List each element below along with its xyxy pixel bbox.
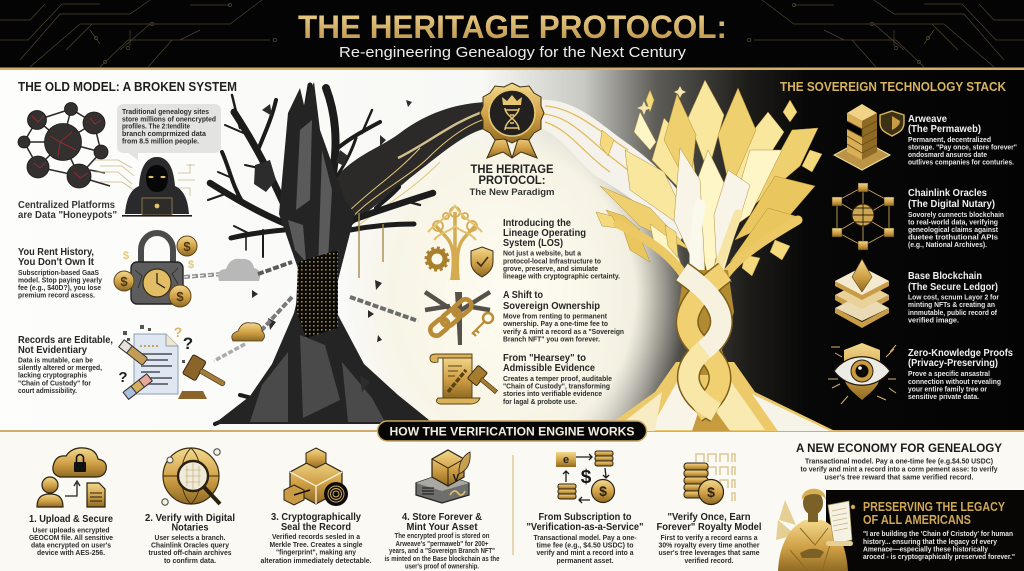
callout: traditional sites [117, 104, 221, 160]
panel: new economy: to verify and mint a record into a corm pement asse: to verify [800, 466, 998, 474]
step 4: store forever and mint: Mint Your Asset [406, 522, 478, 533]
icon: figure holding scroll [776, 489, 855, 571]
text: lineage operating system: Not just a website, but a [503, 250, 581, 258]
text: rent history: Subscription-based GaaS [18, 270, 99, 277]
text: editable records [18, 335, 113, 395]
illustration: crystal gold tree [540, 80, 835, 431]
divider [512, 455, 514, 555]
column: from subscription: verify and mint a record into a [536, 550, 634, 557]
column: from subscription: permanent asset. [556, 558, 614, 565]
text: admissible evidence [503, 353, 612, 406]
banner: how the verification engine works [378, 421, 646, 441]
heading: preserving the legacy: OF ALL AMERICANS [863, 513, 971, 527]
step 1: upload and secure [29, 448, 113, 557]
text: zero knowledge: connection without revealing [908, 379, 1001, 386]
text: lineage operating system: Introducing the [503, 218, 571, 229]
icon: padlock with clock and coins: $ [183, 239, 191, 254]
text: lineage operating system: lineage with cryptographic certainty. [503, 274, 620, 280]
text: sovereign ownership: verify & mint a record as a "Sovereign [503, 329, 624, 336]
step 1: upload and secure: 1. Upload & Secure [29, 514, 113, 525]
icon: payment flow with coins: e [563, 454, 569, 466]
icon: broken network of nodes [18, 102, 110, 188]
panel: old model [18, 80, 292, 399]
text: editable records: silently altered or merged, [18, 365, 102, 372]
crown crystals [596, 80, 822, 290]
step 3: cryptographically seal the record [260, 448, 372, 565]
icon: padlock with clock and coins: $ [120, 274, 128, 289]
step 4: store forever and mint: is minted on the Base blockchain as the [384, 556, 500, 563]
text: arweave: Arweave [908, 114, 947, 125]
text: admissible evidence: for lagal & probote use. [503, 399, 577, 406]
column: verify once: First to verify a record earns a [660, 535, 758, 542]
heading: new paradigm: PROTOCOL: [478, 175, 546, 187]
step 4: store forever and mint: 4. Store Forever & [402, 512, 482, 523]
text: rent history [18, 247, 102, 300]
title [298, 9, 727, 61]
panel: new economy: A NEW ECONOMY FOR GENEALOGY [796, 441, 1002, 455]
text: arweave: storage. "Pay once, store forever" [908, 144, 1017, 152]
text: arweave [908, 114, 1017, 166]
text: rent history: fee (e.g., $40D?), you lose [18, 285, 101, 292]
text: chainlink: Chainlink Oracles [908, 188, 987, 199]
heading: old model: THE OLD MODEL: A BROKEN SYSTEM [18, 80, 237, 94]
text: base blockchain: Base Blockchain [908, 271, 982, 282]
step 2: verify with digital notaries: 2. Verify with Digital [145, 513, 235, 524]
icon: hooded hacker with laptop [95, 157, 195, 217]
icon: padlock with clock and coins: $ [188, 259, 194, 271]
text: honeypots: Centralized Platforms [18, 200, 116, 211]
text: rent history: premium record ascess. [18, 292, 95, 300]
icon: payment flow with coins: $ [581, 467, 592, 488]
step 1: upload and secure: data encrypted on user's [31, 542, 111, 550]
text: chainlink: (e.g., National Archives). [908, 242, 987, 249]
icon: payment flow with coins: $ [599, 483, 607, 499]
quote: "I are building the 'Chain of Cristody' for human [863, 531, 1013, 538]
column: from subscription: "Verification-as-a-Service" [526, 522, 644, 533]
text: chainlink: Sovorely cunnects blockchain [908, 212, 1004, 219]
step 3: cryptographically seal the record: 3. Cryptographically [271, 512, 361, 523]
text: arweave: outlives companies for conturies. [908, 160, 1014, 166]
text: sovereign ownership [503, 290, 624, 344]
text: base blockchain: Low cost, scnum Layor 2 for [908, 294, 999, 302]
icon: arweave server tower [834, 104, 904, 170]
heading: technology stack: THE SOVEREIGN TECHNOLOGY STACK [780, 80, 1006, 94]
panel: preserving the legacy [776, 489, 1024, 571]
text: zero knowledge [908, 348, 1013, 401]
text: lineage operating system: grove, preserve, and simulate [503, 266, 598, 273]
icon: cloud, lock, person and document [37, 448, 106, 507]
text: editable records: court admissibility. [18, 388, 77, 395]
step 2: verify with digital notaries: trusted off-chain archives [148, 550, 232, 557]
text: editable records: Records are Editable, [18, 335, 113, 346]
panel: sovereign technology stack [780, 80, 1017, 404]
text: editable records: Not Evidentiary [18, 345, 87, 356]
text: chainlink: to real-world data, verifying [908, 220, 998, 226]
icon: payment flow with coins [556, 451, 614, 503]
text: lineage operating system: Lineage Operating [503, 228, 586, 239]
text: sovereign ownership: A Shift to [503, 290, 543, 301]
text: base blockchain: (The Secure Ledgor) [908, 282, 998, 293]
text: rent history: You Don't Own It [18, 257, 95, 268]
column: verify once: 30% royalty every time another [658, 542, 760, 550]
column: from subscription: From Subscription to [538, 512, 632, 523]
text: sovereign ownership: Move from renting to permanent [503, 314, 608, 320]
icon: broken chains around tree [214, 297, 418, 361]
text: admissible evidence: From "Hearsey" to [503, 353, 586, 364]
column: from subscription: Transactional model. Pay a one- [534, 535, 637, 542]
text: arweave: Permanent, decentralized [908, 137, 991, 144]
step 4: store forever and mint: The encrypted proof is stored on [394, 533, 490, 540]
text: sovereign ownership: Sovereign Ownership [503, 301, 600, 312]
braided trunk [678, 270, 734, 412]
icon: base blockchain layers [835, 259, 889, 328]
banner: how the verification engine works: HOW THE VERIFICATION ENGINE WORKS [390, 424, 634, 438]
dark ribbon flowing to medal [318, 102, 488, 262]
callout: traditional sites: Traditional genealogy sites [122, 109, 209, 116]
text: admissible evidence: Creates a temper proof, auditable [503, 376, 612, 383]
bottom background panel [0, 430, 1024, 571]
icon: coin stack with pale tree pattern: $ [707, 484, 715, 500]
quote: Amenace—especially these historically [863, 546, 988, 554]
column: verify once: user's tree leverages that same [658, 550, 760, 557]
step 1: upload and secure: device with AES-256. [37, 550, 105, 557]
text: rent history: You Rent History, [18, 247, 94, 258]
text: lineage operating system: protocol-local Infrastructure to [503, 258, 601, 266]
icon: globe and magnifier [162, 448, 220, 505]
icon: golden tree with gear and shield [426, 206, 493, 280]
icon: scroll with chain and gavel [430, 354, 502, 404]
text: chainlink: (The Digital Nutary) [908, 199, 995, 210]
step 2: verify with digital notaries: User selects a branch. [154, 535, 226, 542]
step 3: cryptographically seal the record: Merkle Tree. Creates a single [270, 542, 363, 549]
roots [600, 362, 835, 431]
step 4: store forever and mint: user's proof of ownership. [405, 564, 479, 570]
icon: corrupted document, erasers and gavel: ? [183, 334, 193, 353]
icon: tree with chain and key [425, 292, 493, 345]
text: zero knowledge: sensitive private data. [908, 394, 979, 401]
column: from subscription [526, 451, 644, 565]
text: honeypots: are Data "Honeypots" [18, 210, 117, 221]
text: base blockchain [908, 271, 999, 324]
step 4: store forever and mint: years, and a "Sovereign Branch NFT" [389, 548, 495, 555]
step 4: store forever and mint [384, 450, 500, 570]
column: verify once: "Verify Once, Earn [668, 512, 750, 523]
heading: new paradigm: The New Paradigm [470, 187, 554, 198]
quote [863, 531, 1015, 561]
callout: traditional sites: from 8.5 million people. [122, 138, 199, 146]
text: editable records: lacking cryptographis [18, 372, 87, 380]
text: base blockchain: innmutable, public record of [908, 310, 998, 317]
step 2: verify with digital notaries: to confirm data. [164, 558, 216, 565]
icon: padlock with clock and coins: $ [176, 289, 184, 304]
text: rent history: model. Stop paying yearly [18, 278, 102, 284]
central background panel [0, 68, 1024, 495]
sparkles [637, 86, 686, 115]
step 3: cryptographically seal the record: "fingerprint", making any [276, 550, 356, 556]
lower branches [618, 205, 798, 295]
icon: corrupted document, erasers and gavel: ? [118, 369, 128, 386]
icon: chain to grey cloud [184, 259, 292, 281]
text: sovereign ownership: ownership. Pay a one-time fee to [503, 321, 608, 328]
text: admissible evidence: "Chain of Custody", transforming [503, 384, 610, 390]
text: honeypots [18, 200, 117, 221]
text: lineage operating system [503, 218, 620, 280]
tree fragments [252, 100, 412, 392]
text: zero knowledge: Zero-Knowledge Proofs [908, 348, 1013, 359]
icon: zero knowledge eye and shield [828, 343, 896, 404]
step 2: verify with digital notaries: Chainlink Oracles query [151, 542, 229, 550]
quote: history... ensuring that the legacy of every [863, 539, 997, 546]
white and gold ribbon from medal [540, 100, 695, 245]
column: verify once [656, 454, 762, 565]
step 3: cryptographically seal the record: alteration immediately detectable. [260, 558, 372, 565]
icon: gold cloud [232, 323, 264, 341]
text: base blockchain: minting NFTs & creating an [908, 302, 995, 309]
step 1: upload and secure: User uploads encrypted [32, 528, 110, 534]
callout: traditional sites: store millions of onencrypted [122, 117, 216, 124]
header band [0, 0, 1024, 68]
quote: aroced - is cryptographically preserved forever." [863, 554, 1015, 561]
text: admissible evidence: stories into verifiable evidence [503, 391, 602, 398]
heading: preserving the legacy [863, 500, 1006, 527]
icon: cube on server with leaf: V [453, 473, 460, 484]
text: editable records: "Chain of Custody" for [18, 380, 91, 388]
text: admissible evidence: Admissible Evidence [503, 363, 595, 374]
text: chainlink: geneological claims against [908, 227, 999, 234]
text: arweave: ondosmard ansuros date [908, 152, 987, 159]
text: chainlink [908, 188, 1004, 249]
column: verify once: Forever" Royalty Model [656, 522, 762, 533]
text: zero knowledge: Prove a specific ansastral [908, 371, 990, 378]
illustration: dead cracked tree [208, 82, 488, 424]
panel: new economy [796, 441, 1002, 482]
text: lineage operating system: System (LOS) [503, 238, 563, 249]
icon: corrupted document, erasers and gavel: ? [174, 324, 182, 340]
title: Re-engineering Genealogy for the Next Century [339, 45, 687, 61]
step 2: verify with digital notaries [145, 448, 235, 565]
step 4: store forever and mint: Arweave's "permaweb" for 200+ [396, 541, 488, 548]
column: verify once: verified record. [684, 558, 734, 565]
text: chainlink: duetee trothutional APIs [908, 234, 998, 242]
panel: new economy: user's tree reward that same verified record. [824, 474, 974, 482]
icon: corrupted document, erasers and gavel [118, 324, 230, 399]
text: base blockchain: verified image. [908, 318, 959, 324]
text: arweave: (The Permaweb) [908, 124, 981, 135]
title: THE HERITAGE PROTOCOL: [298, 9, 727, 45]
icon: heritage medal [480, 83, 544, 158]
text: zero knowledge: your entire family tree or [908, 386, 987, 394]
step 3: cryptographically seal the record: Verified records sesled in a [272, 534, 360, 541]
icon: chainlink oracle hexagon [832, 183, 894, 250]
step 2: verify with digital notaries: Notaries [172, 522, 209, 534]
text: sovereign ownership: Branch NFT" you own forever. [503, 336, 600, 344]
heading: new paradigm: THE HERITAGE [470, 164, 554, 176]
heading: new paradigm [470, 164, 554, 198]
step 1: upload and secure: GEOCOM file. All sensitive [29, 535, 113, 542]
heading: preserving the legacy: PRESERVING THE LEGACY [863, 500, 1006, 514]
callout: traditional sites: profiles. The 2:tendlite [122, 124, 190, 131]
column: from subscription: time fee (e.g., $4.50 USDC) to [536, 542, 634, 550]
text: editable records: Data is mutable, can be [18, 358, 93, 364]
callout: traditional sites: branch comprmized data [122, 131, 206, 138]
panel: new economy: Transactional model. Pay a one-time fee (e.g.$4.50 USDC) [805, 458, 993, 466]
text: zero knowledge: (Privacy-Preserving) [908, 358, 998, 369]
icon: cube and fingerprint [284, 448, 348, 506]
icon: padlock with clock and coins [114, 233, 197, 307]
step 3: cryptographically seal the record: Seal the Record [281, 522, 351, 533]
icon: padlock with clock and coins: $ [123, 250, 129, 262]
